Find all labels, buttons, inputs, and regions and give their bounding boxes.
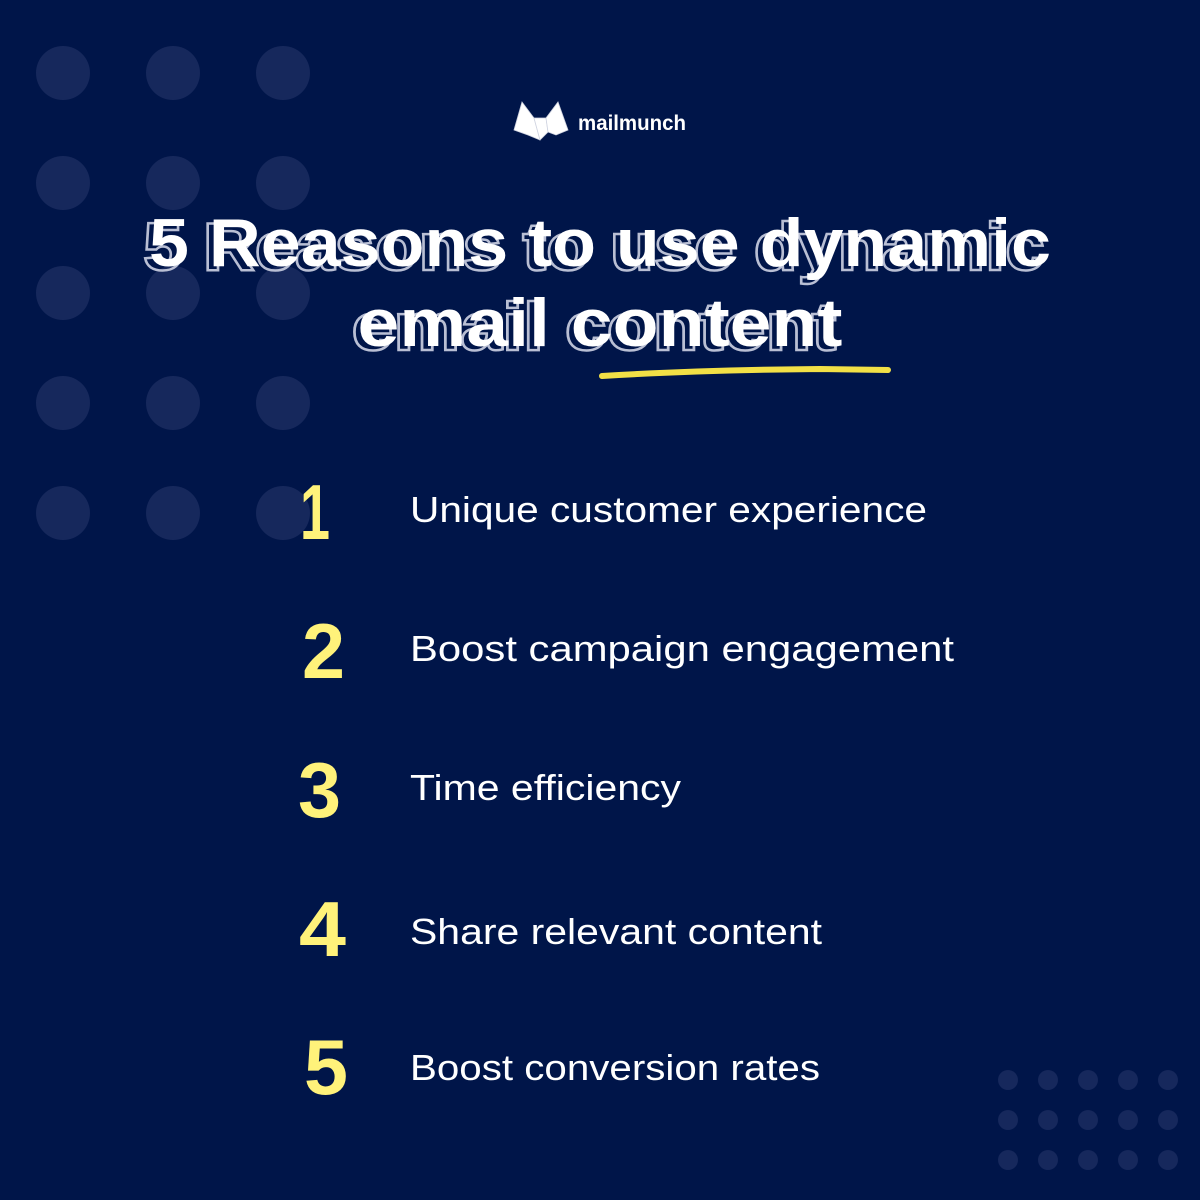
decorative dots grid left: [36, 46, 310, 540]
item 3: Time efficiency: [410, 767, 681, 808]
item 2: 2: [302, 607, 345, 695]
item 3: 3: [298, 746, 341, 834]
decorative dots grid right: [998, 1070, 1178, 1170]
item 1: 1: [300, 468, 330, 556]
list items: [298, 468, 954, 1111]
title: email content: [358, 285, 842, 361]
title: 5 Reasons to use dynamic: [149, 205, 1051, 281]
item 5: Boost conversion rates: [410, 1047, 820, 1088]
item 4: Share relevant content: [410, 911, 822, 952]
item 2: Boost campaign engagement: [410, 628, 954, 669]
title: 5 Reasons to use dynamic: [143, 209, 1045, 285]
item 1: Unique customer experience: [410, 489, 927, 530]
item 5: 5: [304, 1023, 348, 1111]
logo text: mailmunch: [578, 112, 686, 135]
item 2: [302, 607, 954, 695]
item 4: 4: [299, 885, 346, 973]
yellow underline stroke: [602, 369, 888, 376]
item 5: [304, 1023, 820, 1111]
item 4: [299, 885, 822, 973]
item 1: [300, 468, 927, 556]
item 3: [298, 746, 681, 834]
logo: [514, 102, 686, 140]
title: [143, 205, 1051, 365]
icon: logo mark: [514, 102, 568, 140]
title: email content: [352, 289, 836, 365]
